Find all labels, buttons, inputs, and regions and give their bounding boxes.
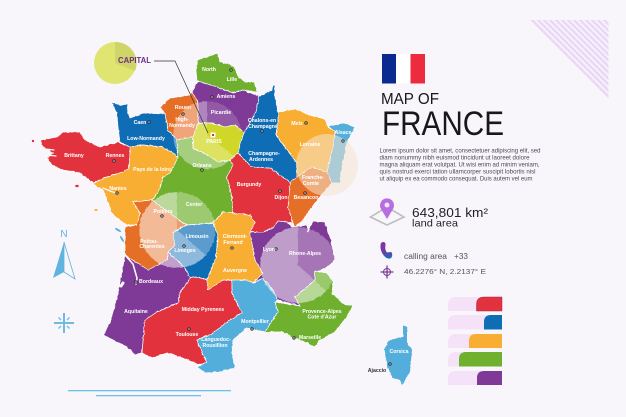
region: Pays de la Loire <box>93 145 178 225</box>
region: Languedoc-Roussillon <box>197 278 278 373</box>
region labels and city markers: Low-Normandy <box>127 136 165 142</box>
region labels and city markers: Languedoc- <box>201 337 231 343</box>
region labels and city markers: Clermont- <box>223 234 248 240</box>
calling area text: calling area <box>404 252 448 261</box>
highlight circle: Centre and Limousin <box>139 192 215 268</box>
region labels and city markers: Metz <box>291 121 303 127</box>
Corsica island: Corsica <box>389 349 409 355</box>
map of mainland France <box>40 53 355 373</box>
region labels and city markers: Marseille <box>299 335 321 341</box>
region labels and city markers: Pays de la loire <box>133 167 171 173</box>
region labels and city markers: Toulouse <box>176 332 198 338</box>
legend bar: blue <box>448 315 502 330</box>
region labels and city markers: Nantes <box>109 186 127 192</box>
highlight circle: Paris <box>173 101 241 169</box>
icon: north arrow: N <box>60 229 68 240</box>
region labels and city markers: Charentes <box>139 244 165 250</box>
legend bar: green <box>448 352 502 366</box>
description paragraph: magna aliquam erat volutpat. Ut wisi enim ad minim veniam, <box>380 162 540 168</box>
icon: location pin on land <box>370 198 404 225</box>
region labels and city markers: Ferrand <box>223 240 243 246</box>
icon: north arrow <box>53 229 75 279</box>
coast details: estuaries <box>45 149 137 286</box>
description paragraph: Lorem ipsum dolor sit amet, consectetuer adipiscing elit, sed <box>380 148 541 154</box>
region: Burgundy <box>227 153 293 232</box>
icon: telephone <box>380 242 392 259</box>
land area figure <box>412 205 489 230</box>
description paragraph <box>380 148 541 182</box>
region labels and city markers: Champagne- <box>248 151 280 157</box>
region labels and city markers: Limousin <box>185 234 209 240</box>
region labels and city markers: Comte <box>303 181 319 187</box>
region: Alsace <box>327 123 355 183</box>
region: Rhone-Alpes <box>250 221 335 306</box>
calling area text <box>404 252 468 261</box>
region labels and city markers <box>64 67 351 349</box>
region: Centre <box>152 137 233 225</box>
region labels and city markers: Aquitaine <box>124 309 148 315</box>
region: Lorraine <box>276 109 335 177</box>
region labels and city markers: Franche- <box>302 175 324 181</box>
region: Low-Normandy <box>111 102 178 158</box>
region: Midday Pyrenees <box>142 277 242 365</box>
region labels and city markers: Lorraine <box>300 142 320 148</box>
region labels and city markers: Montpellier <box>241 319 269 325</box>
calling area text: +33 <box>454 252 468 261</box>
legend bar: amber <box>448 334 502 348</box>
region labels and city markers: Provence-Alpes <box>302 309 342 315</box>
region labels and city markers: Besancon <box>294 195 318 201</box>
region labels and city markers: Rousillion <box>202 343 228 349</box>
region labels and city markers: Picardie <box>211 110 231 116</box>
region labels and city markers: Auvergne <box>223 268 247 274</box>
region: Picardie <box>192 81 259 133</box>
land area figure: land area <box>412 218 458 230</box>
region: North <box>196 53 257 93</box>
region labels and city markers: Orleans <box>192 163 212 169</box>
region labels and city markers: Lyon <box>263 247 275 253</box>
region: Brittany <box>40 132 133 183</box>
region: Poitou-Charentes <box>125 200 187 270</box>
description paragraph: diam nonummy nibh euismod tincidunt ut laoreet dolore <box>380 154 530 162</box>
flag of France <box>382 54 425 84</box>
region labels and city markers: Cote d'Azur <box>308 314 336 320</box>
bottom decorative lines <box>68 390 231 396</box>
land area figure: 643,801 km² <box>412 205 489 220</box>
legend bar: red <box>448 297 502 311</box>
region labels and city markers: Lille <box>227 77 237 83</box>
region labels and city markers: Ardennes <box>249 157 273 163</box>
region: Auvergne <box>207 212 263 290</box>
region: Franche-Comte <box>288 167 332 227</box>
capital label: CAPITAL <box>118 56 151 65</box>
region labels and city markers: North <box>202 67 216 73</box>
region labels and city markers: Brittany <box>64 153 84 159</box>
region labels and city markers: Dijon <box>275 195 287 201</box>
region labels and city markers: Chalons-en <box>248 118 276 124</box>
title <box>381 91 504 143</box>
highlight circle: Rhone-Alpes <box>260 227 336 303</box>
offshore islands <box>32 140 125 243</box>
region labels and city markers: Burgundy <box>237 182 261 188</box>
region: Aquitaine <box>103 252 190 355</box>
region: High-Normandy <box>160 92 198 140</box>
description paragraph: ut aliquip ex ea commodo consequat. Duis autem vel eum <box>380 176 532 182</box>
region labels and city markers: Limoges <box>174 248 196 254</box>
region labels and city markers: Rennes <box>106 153 124 159</box>
title: MAP OF <box>381 91 439 108</box>
legend bar: purple <box>448 371 502 385</box>
region labels and city markers: Poitou- <box>140 239 158 245</box>
region labels and city markers: Alsace <box>335 130 351 136</box>
region: Champagne-Ardennes <box>238 85 297 182</box>
icon: compass crosshair <box>54 313 74 333</box>
region labels and city markers: Poitiers <box>153 209 173 215</box>
decorative striped corner <box>530 20 608 98</box>
highlight circle: Lorraine and Alsace <box>296 134 358 196</box>
region labels and city markers: Amiens <box>217 94 235 100</box>
region: Paris <box>193 123 244 162</box>
Corsica island <box>368 325 412 385</box>
legend stacked colour bars <box>448 297 502 385</box>
coordinates text: 46.2276° N, 2.2137° E <box>404 267 486 276</box>
region: Limousin <box>168 223 218 280</box>
region labels and city markers: Champagne <box>248 124 278 130</box>
region labels and city markers: Midday Pyrenees <box>182 307 224 313</box>
region labels and city markers: PARIS <box>206 139 222 145</box>
region labels and city markers: Normandy <box>169 123 195 129</box>
region labels and city markers: Bordeaux <box>139 279 163 285</box>
region labels and city markers: Center <box>186 202 202 208</box>
icon: coordinates crosshair <box>380 266 394 278</box>
region labels and city markers: Caen <box>134 120 146 126</box>
title: FRANCE <box>382 105 504 143</box>
Corsica island: Ajaccio <box>368 368 386 374</box>
region labels and city markers: High- <box>175 117 189 123</box>
region labels and city markers: Rouen <box>175 105 191 111</box>
region: Provence-Alpes-Cote d'Azur <box>265 271 353 347</box>
capital leader line <box>154 61 208 133</box>
capital marker circle <box>94 42 137 84</box>
description paragraph: quis nostrud exerci tation ullamcorper suscipit lobortis nisl <box>380 168 536 176</box>
region labels and city markers: Rhone-Alpes <box>289 251 321 257</box>
